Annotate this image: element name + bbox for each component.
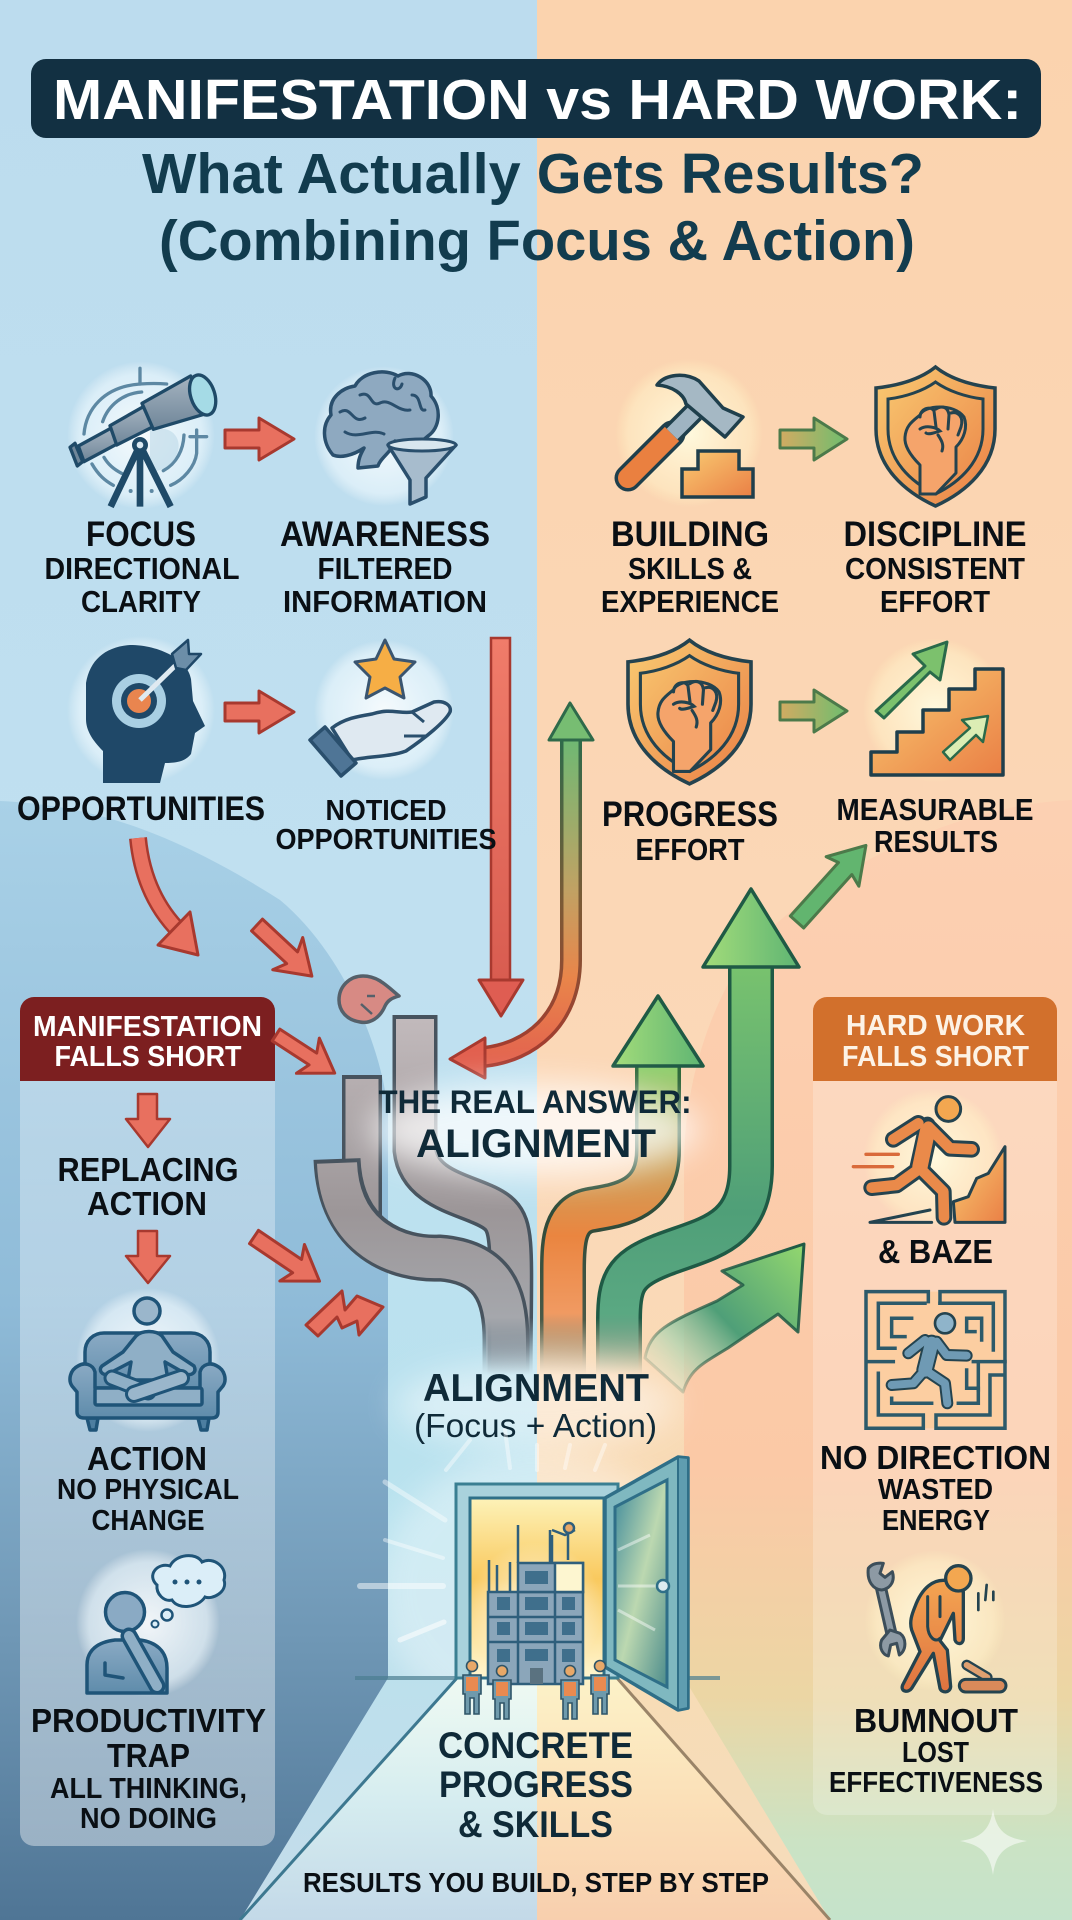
label: building: BUILDING — [611, 515, 769, 554]
label: discipline: CONSISTENT — [845, 551, 1025, 586]
arrow: red diagonal one — [242, 909, 327, 992]
label: productivity trap: NO DOING — [80, 1803, 217, 1835]
header text: FALLS SHORT — [54, 1041, 242, 1073]
label: focus: DIRECTIONAL — [44, 551, 240, 586]
icon: telescope — [67, 361, 220, 509]
label: measurable results: RESULTS — [874, 824, 998, 859]
label: action no physical change: ACTION — [87, 1440, 207, 1477]
glow behind lower alignment label — [396, 1363, 676, 1447]
label: concrete progress and skills: & SKILLS — [458, 1804, 613, 1845]
footer tagline: RESULTS YOU BUILD, STEP BY STEP — [303, 1867, 769, 1898]
label: no direction wasted energy: NO DIRECTION — [820, 1439, 1051, 1476]
label: burnout lost effectiveness — [829, 1702, 1043, 1799]
label: productivity trap: PRODUCTIVITY — [31, 1702, 266, 1739]
alignment label — [414, 1367, 657, 1444]
panel: manifestation falls short — [20, 997, 275, 1846]
icon: shield with fist, discipline — [876, 367, 995, 506]
arrow: long red down — [479, 638, 523, 1016]
icon: hammer and bricks — [615, 359, 763, 507]
heading: the real answer — [378, 1084, 692, 1166]
pipe and arrow: orange to green — [563, 996, 703, 1400]
arrow: broken zigzag — [306, 1291, 383, 1336]
door and frame — [456, 1457, 688, 1719]
subtitle: (Combining Focus & Action) — [159, 209, 915, 273]
icon: burned out worker with wrench — [864, 1550, 1006, 1692]
label: discipline — [844, 515, 1026, 619]
arrow: focus to awareness — [225, 418, 294, 460]
label: noticed opportunities — [276, 795, 496, 856]
label: building: EXPERIENCE — [601, 584, 779, 619]
label: no direction wasted energy: ENERGY — [882, 1505, 990, 1537]
label: productivity trap: ALL THINKING, — [50, 1773, 247, 1805]
label: concrete progress and skills: CONCRETE — [438, 1725, 633, 1766]
label: noticed opportunities: NOTICED — [326, 795, 446, 827]
arrow: red diagonal two — [265, 1017, 346, 1091]
label: discipline: EFFORT — [880, 584, 990, 619]
heading: the real answer: THE REAL ANSWER: — [378, 1084, 692, 1120]
label: action no physical change: CHANGE — [92, 1505, 204, 1537]
header text — [33, 1011, 262, 1073]
label: awareness — [280, 515, 490, 619]
label: discipline: DISCIPLINE — [844, 515, 1026, 554]
arrow: green sweep right — [645, 1244, 804, 1392]
label: measurable results — [836, 792, 1034, 859]
label: focus: FOCUS — [86, 515, 196, 554]
arrow: red diagonal three — [242, 1219, 332, 1299]
label: concrete progress and skills: PROGRESS — [439, 1764, 633, 1805]
label: no direction wasted energy — [820, 1439, 1051, 1537]
arrow: progress to results — [780, 690, 847, 732]
label: burnout lost effectiveness: EFFECTIVENESS — [829, 1767, 1043, 1799]
label: no direction wasted energy: WASTED — [878, 1474, 993, 1506]
subtitle — [142, 142, 924, 273]
building under construction — [488, 1523, 583, 1684]
panel: hard work falls short — [813, 997, 1057, 1815]
label: burnout lost effectiveness: BUMNOUT — [854, 1702, 1018, 1739]
icon: deflated red ball — [339, 976, 399, 1022]
icon: thinking person with cloud — [76, 1549, 225, 1697]
label: awareness: FILTERED — [318, 551, 452, 586]
sparkle — [960, 1809, 1027, 1875]
alignment label: (Focus + Action) — [414, 1407, 657, 1444]
label: awareness: INFORMATION — [283, 584, 487, 619]
label: building: SKILLS & — [628, 551, 752, 586]
alignment label: ALIGNMENT — [423, 1367, 649, 1410]
label: concrete progress and skills — [438, 1725, 633, 1845]
header text: FALLS SHORT — [842, 1041, 1029, 1073]
arrow: small green to results — [781, 831, 882, 937]
label: replacing action: ACTION — [87, 1185, 207, 1222]
arrow down one — [126, 1094, 170, 1147]
label: productivity trap — [31, 1702, 266, 1835]
arrow: building to discipline — [780, 418, 847, 460]
arrow: curved red from opportunities — [138, 838, 198, 955]
arrow: opportunities to noticed — [225, 691, 294, 733]
label: noticed opportunities: OPPORTUNITIES — [276, 824, 496, 856]
floor: perspective path — [240, 1678, 830, 1920]
label: baze: & BAZE — [878, 1233, 993, 1270]
light rays around door — [360, 1430, 605, 1640]
icon: maze with runner — [866, 1292, 1005, 1428]
label: opportunities: OPPORTUNITIES — [17, 790, 265, 828]
label: progress: PROGRESS — [602, 795, 778, 834]
icon: person meditating on couch — [70, 1288, 225, 1432]
title banner: MANIFESTATION vs HARD WORK: — [53, 68, 1022, 132]
label: action no physical change: NO PHYSICAL — [57, 1474, 239, 1506]
header text — [842, 1010, 1029, 1073]
label: replacing action — [58, 1151, 238, 1222]
icon: brain and funnel — [314, 366, 456, 506]
header text: HARD WORK — [846, 1010, 1025, 1042]
label: measurable results: MEASURABLE — [836, 792, 1034, 827]
pipe and arrow: big green — [619, 889, 799, 1400]
label: focus — [44, 515, 240, 619]
pipes: grey dead-end paths — [337, 1015, 511, 1400]
label: awareness: AWARENESS — [280, 515, 490, 554]
label: productivity trap: TRAP — [107, 1737, 190, 1774]
icon: runner and slope — [853, 1088, 1005, 1228]
subtitle: What Actually Gets Results? — [142, 142, 924, 206]
icon: stairs with arrows — [863, 638, 1007, 782]
glow behind alignment heading — [370, 1084, 700, 1176]
label: action no physical change — [57, 1440, 239, 1537]
arrow down two — [126, 1231, 170, 1283]
label: progress: EFFORT — [636, 832, 745, 867]
panel header — [20, 997, 275, 1081]
label: focus: CLARITY — [81, 584, 201, 619]
label: burnout lost effectiveness: LOST — [902, 1737, 969, 1769]
panel header — [813, 997, 1057, 1081]
workers — [463, 1660, 609, 1719]
heading: the real answer: ALIGNMENT — [416, 1122, 656, 1166]
label: building — [601, 515, 779, 619]
header text: MANIFESTATION — [33, 1011, 262, 1043]
arrow: green up curving to red left — [450, 703, 593, 1078]
icon: shield with fist, progress — [628, 640, 751, 784]
label: replacing action: REPLACING — [58, 1151, 238, 1188]
open door leaf — [605, 1457, 688, 1710]
icon: hand with star — [310, 640, 454, 780]
icon: head with target — [67, 636, 215, 784]
label: progress — [602, 795, 778, 867]
